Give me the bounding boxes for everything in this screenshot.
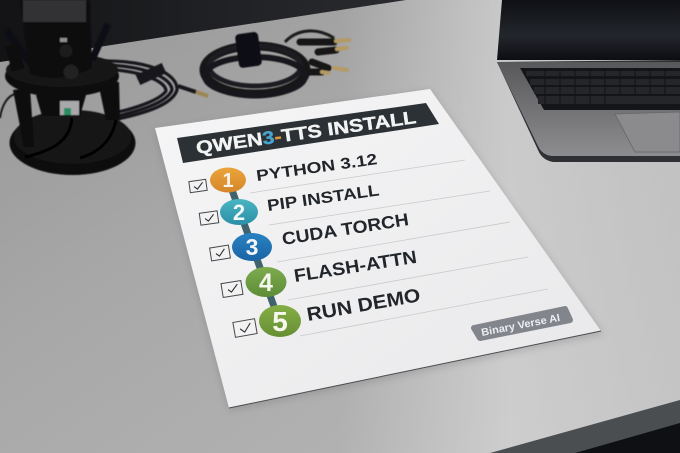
title banner xyxy=(177,103,439,163)
paper sheet xyxy=(155,89,601,408)
mic grille xyxy=(23,0,86,22)
title text: QWEN 3-TTS INSTALL xyxy=(195,107,417,158)
trackpad xyxy=(615,112,680,152)
mic body xyxy=(20,0,92,78)
timeline connector xyxy=(232,190,276,312)
laptop xyxy=(497,0,680,162)
checkbox 5 xyxy=(233,319,257,337)
badge 2 xyxy=(220,199,258,225)
badge 4 xyxy=(246,267,286,297)
mic legs xyxy=(13,82,120,147)
desk front edge xyxy=(490,400,680,453)
badge 3 xyxy=(232,233,272,261)
badge 3: 3 xyxy=(246,234,258,260)
badge 5: 5 xyxy=(272,306,288,337)
label 4: FLASH-ATTN xyxy=(292,247,418,286)
label 1: PYTHON 3.12 xyxy=(255,151,378,185)
step 5: run demo xyxy=(233,285,422,337)
rear cables xyxy=(285,31,334,42)
checkbox 1 xyxy=(189,179,207,193)
microphone xyxy=(5,0,136,175)
mic knobs xyxy=(60,44,72,58)
badge 1 xyxy=(210,168,246,192)
mic cable xyxy=(25,118,116,158)
label 5: RUN DEMO xyxy=(305,285,422,326)
small coil plug xyxy=(178,86,196,92)
badge 2: 2 xyxy=(233,200,245,225)
small cable coil xyxy=(0,61,208,119)
mic stand base xyxy=(10,111,136,175)
dark background wall xyxy=(0,0,406,62)
step 3: cuda xyxy=(210,209,410,261)
step 2: pip xyxy=(199,182,381,225)
floor shadow xyxy=(575,423,680,453)
shock mount arms xyxy=(6,24,108,68)
laptop screen xyxy=(497,0,680,60)
keyboard xyxy=(520,68,680,110)
paper shadow xyxy=(155,91,603,411)
cable strap xyxy=(235,31,262,68)
label 2: PIP INSTALL xyxy=(266,182,381,215)
badge 5 xyxy=(259,305,301,337)
divider lines xyxy=(250,160,548,336)
shock mount ring xyxy=(5,55,119,97)
watermark badge: Binary Verse AI xyxy=(480,312,561,339)
step 4: flash-attn xyxy=(221,247,418,297)
laptop base xyxy=(497,60,680,162)
large cable coil xyxy=(204,31,349,95)
checkbox 2 xyxy=(199,211,219,225)
small coil strap xyxy=(138,68,164,80)
cable plugs xyxy=(300,40,349,73)
badge 1: 1 xyxy=(222,170,234,192)
connector xyxy=(60,101,79,115)
checkbox 3 xyxy=(210,245,230,261)
checkbox 4 xyxy=(221,281,243,297)
badge 4: 4 xyxy=(259,269,273,297)
label 3: CUDA TORCH xyxy=(280,209,410,249)
step 1: python xyxy=(189,151,378,193)
